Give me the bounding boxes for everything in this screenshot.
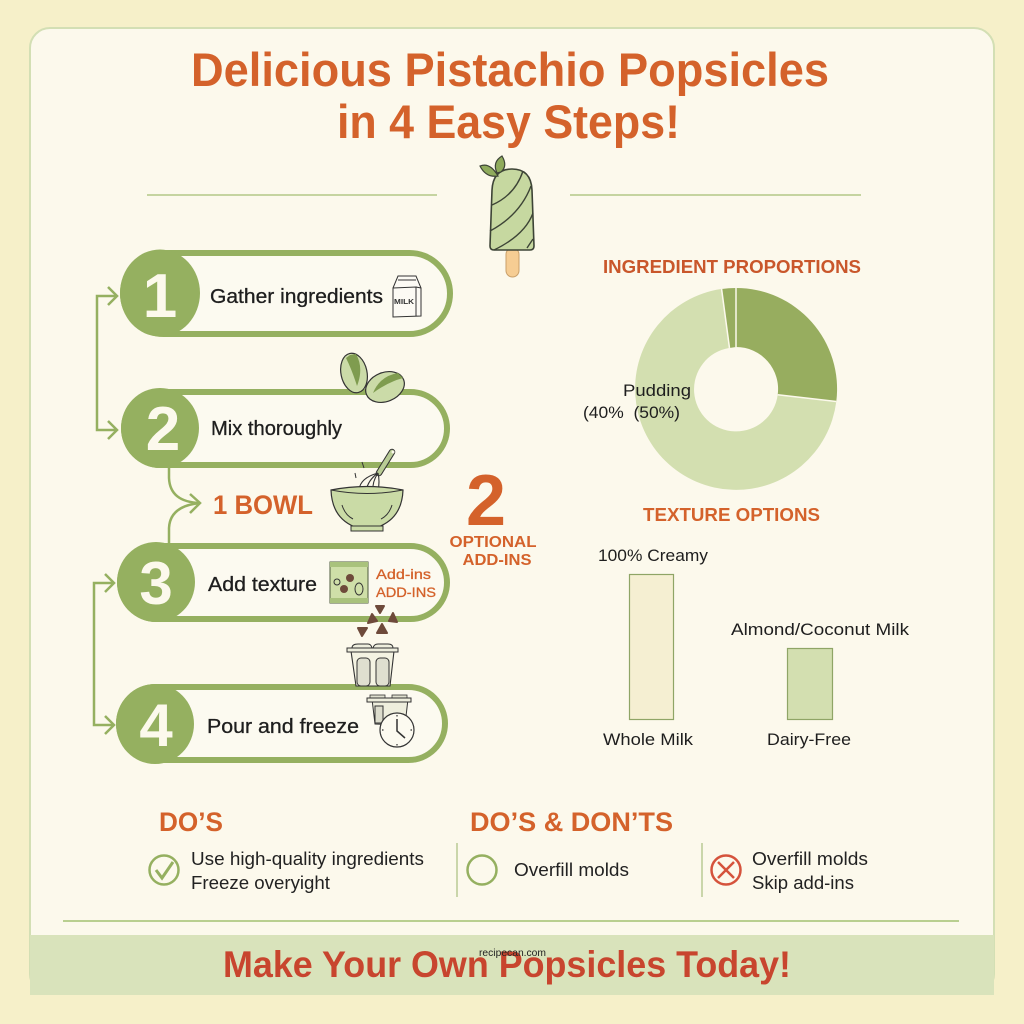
list: don'ts: Skip add-ins (752, 873, 854, 893)
title (191, 43, 829, 148)
icon: pistachios (337, 351, 409, 408)
panel: step 4 (116, 684, 445, 764)
list: neutral: Overfill molds (514, 860, 629, 880)
panel: step 4: 4 (139, 692, 173, 759)
banner: call to action (30, 935, 994, 995)
arrow: step 3 to step 4 connector (94, 574, 114, 734)
list: do's: Freeze overyight (191, 873, 330, 893)
heading: texture options: TEXTURE OPTIONS (643, 504, 820, 525)
callout: 2 optional add-ins (450, 461, 537, 569)
banner: call to action: Make Your Own Popsicles Today! (223, 944, 791, 985)
chart: ingredient donut: (40% (50%) (583, 403, 680, 422)
list: do's (150, 849, 424, 893)
callout: 2 optional add-ins: OPTIONAL (450, 534, 537, 551)
chart: texture bars (598, 546, 910, 749)
panel: step 3 (117, 542, 447, 622)
panel: step 1: Gather ingredients (210, 286, 383, 308)
panel: step 1 (120, 250, 450, 336)
arrow: step 2 and 3 to 1 bowl (169, 468, 200, 543)
panel: step 2: Mix thoroughly (211, 418, 342, 440)
panel: step 2: 2 (146, 395, 180, 464)
icon: add-ins bag (330, 562, 368, 603)
list: don'ts (712, 849, 868, 893)
heading: ingredient proportions: INGREDIENT PROPORTIONS (603, 256, 861, 277)
chart: texture bars: Dairy-Free (767, 730, 851, 749)
chart: texture bars: 100% Creamy (598, 546, 709, 565)
title: in 4 Easy Steps! (337, 95, 680, 148)
chart: ingredient donut (583, 288, 837, 490)
panel: step 1: 1 (143, 262, 177, 331)
label: 1 bowl: 1 BOWL (213, 490, 313, 520)
list: neutral (468, 856, 629, 884)
panel: step 3: 3 (139, 550, 173, 617)
title: Delicious Pistachio Popsicles (191, 43, 829, 96)
panel: step 3: ADD-INS (376, 584, 436, 600)
chart: texture bars: Almond/Coconut Milk (731, 620, 910, 639)
panel: step 3: Add texture (208, 574, 317, 596)
panel: step 4: Pour and freeze (207, 716, 359, 738)
icon: popsicle (480, 156, 534, 277)
icon: popsicle molds (347, 644, 398, 686)
callout: 2 optional add-ins: 2 (466, 461, 506, 541)
callout: 2 optional add-ins: ADD-INS (462, 552, 532, 569)
banner: call to action: recipecan.com (479, 947, 546, 959)
list: do's: Use high-quality ingredients (191, 849, 424, 869)
heading: do's and don'ts: DO’S & DON’TS (470, 807, 673, 837)
heading: do's: DO’S (159, 807, 223, 837)
panel: step 3: Add-ins (376, 566, 431, 582)
chart: texture bars: Whole Milk (603, 730, 694, 749)
icon: milk carton: MILK (394, 299, 414, 306)
arrow: step 1 to step 2 connector (97, 287, 117, 439)
icon: milk carton (393, 276, 421, 317)
icon: mold and clock (367, 695, 414, 747)
icon: falling chocolate chips (358, 606, 397, 636)
chart: ingredient donut: Pudding (623, 381, 691, 400)
icon: bowl and whisk (331, 450, 403, 531)
list: don'ts: Overfill molds (752, 849, 868, 869)
panel: step 2 (121, 388, 447, 468)
